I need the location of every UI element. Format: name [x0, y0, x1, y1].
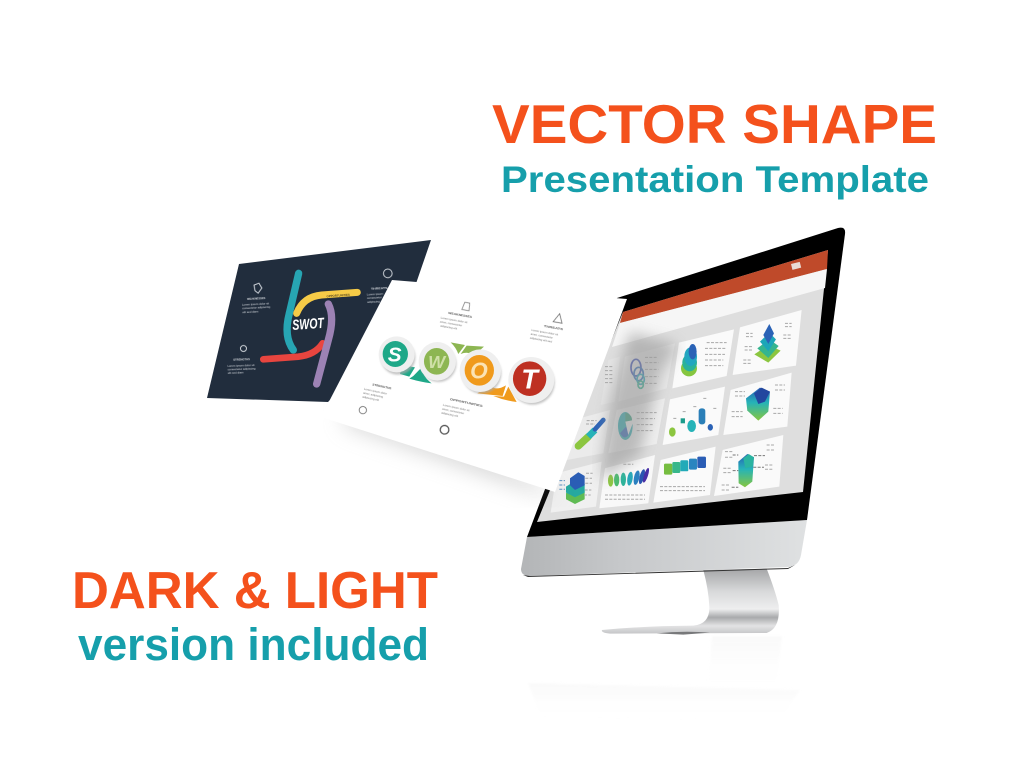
- monitor bezel: [527, 228, 845, 537]
- light slide shadow: [345, 405, 560, 498]
- sheet shadow cast on screen: [600, 332, 678, 480]
- opportunities bar label: OPPORTUNITIES: [326, 293, 350, 298]
- opportunities block: OPPORTUNITIES: [450, 397, 483, 408]
- thumbnail caption lines: [586, 385, 785, 431]
- strengths block: elit sed diam: [228, 371, 244, 375]
- weaknesses block: Lorem ipsum dolor sit: [440, 316, 468, 324]
- dark SWOT slide: [207, 240, 431, 402]
- monitor chin: [521, 520, 807, 576]
- threats block: Lorem ipsum: [367, 292, 384, 297]
- pyramid chart: [754, 324, 781, 363]
- strengths block: Lorem ipsum dolor: [364, 387, 387, 396]
- strengths block: consectetur adipiscing: [227, 366, 256, 371]
- isometric column chart: [738, 454, 754, 487]
- purple swoosh: [317, 304, 332, 384]
- badge S: [379, 336, 415, 375]
- layered cube chart: [566, 472, 585, 504]
- opportunities block: amet, consectetur: [442, 407, 465, 415]
- stacked cone chart: [681, 344, 697, 376]
- powerpoint title bar: [620, 250, 828, 323]
- icon: monitor stand: [602, 569, 779, 635]
- weaknesses block: consectetur adipiscing: [242, 305, 271, 310]
- monitor: [521, 228, 845, 577]
- rounded tile row chart: [664, 457, 706, 475]
- orange arrow connector: [477, 385, 517, 402]
- weaknesses block: amet, consectetur: [440, 320, 463, 327]
- opportunities block: adipiscing elit: [441, 410, 459, 418]
- isometric bars chart: [669, 408, 713, 437]
- slide thumbnails grid: [551, 310, 802, 513]
- monitor screen: [537, 250, 828, 522]
- weaknesses block: WEAKNESSES: [247, 296, 265, 301]
- heading: DARK & LIGHT: DARK & LIGHT: [72, 562, 438, 620]
- strengths block: amet, adipiscing: [363, 391, 384, 399]
- weaknesses block: Lorem ipsum dolor sit: [242, 301, 269, 307]
- strengths block: STRENGTHS: [372, 383, 392, 391]
- SWOT wordmark: SWOT: [292, 316, 325, 334]
- threats block: [530, 309, 566, 345]
- capsule row chart: [608, 467, 650, 487]
- weaknesses block: adipiscing elit: [440, 324, 458, 331]
- threats block: [366, 269, 394, 304]
- badge T: [508, 357, 555, 405]
- threats block: amet, consectetur: [530, 332, 553, 340]
- diagonal capsules chart: [578, 420, 603, 446]
- badge W: W: [428, 352, 447, 372]
- threats block: adipiscing elit sed: [530, 336, 553, 343]
- dark slide swot swoosh: [227, 269, 394, 384]
- badge O: [460, 349, 501, 394]
- weaknesses block: [241, 283, 271, 314]
- threats block: consectetur: [367, 295, 382, 300]
- thumbnail row 2: [567, 373, 792, 460]
- threats block: Lorem ipsum dolor sit: [531, 328, 559, 336]
- badge S: S: [388, 343, 402, 366]
- yellow swoosh: [297, 292, 357, 313]
- strengths block: [359, 381, 392, 419]
- weaknesses block: elit sed diam: [242, 309, 259, 314]
- light SWOT slide: [321, 280, 627, 492]
- thumbnail row 1: [601, 310, 802, 405]
- ring spiral chart: [631, 359, 644, 388]
- strengths block: Lorem ipsum dolor sit: [227, 363, 255, 368]
- threats block: THREATS: [371, 286, 388, 291]
- opportunities block: [437, 396, 483, 441]
- red swoosh: [263, 343, 323, 359]
- weaknesses block: WEAKNESSES: [448, 311, 472, 319]
- badge T: T: [521, 364, 540, 395]
- isometric block chart: [746, 388, 770, 421]
- subheading: version included: version included: [78, 619, 429, 670]
- subtitle: Presentation Template: Presentation Template: [501, 159, 929, 200]
- opportunities block: Lorem ipsum dolor sit: [443, 403, 470, 412]
- weaknesses block: [439, 299, 474, 333]
- thumbnail caption lines: [605, 323, 792, 383]
- badge O: O: [470, 358, 488, 384]
- powerpoint ribbon: [612, 269, 827, 347]
- strengths block: STRENGTHS: [233, 357, 250, 362]
- teal swoosh: [287, 273, 299, 350]
- badge W: [419, 342, 456, 382]
- title: VECTOR SHAPE: VECTOR SHAPE: [492, 93, 937, 155]
- monitor reflection: [528, 636, 800, 720]
- thumbnail caption lines: [559, 445, 775, 499]
- strengths block: adipiscing elit: [362, 395, 380, 402]
- threats block: adipiscing: [367, 299, 380, 304]
- split pie chart: [618, 412, 634, 440]
- strengths block: [227, 345, 256, 375]
- teal arrow connector: [400, 365, 432, 383]
- threats block: THREATS: [544, 324, 563, 331]
- thumbnail row 3: [551, 435, 783, 513]
- green arrow connector: [451, 342, 484, 357]
